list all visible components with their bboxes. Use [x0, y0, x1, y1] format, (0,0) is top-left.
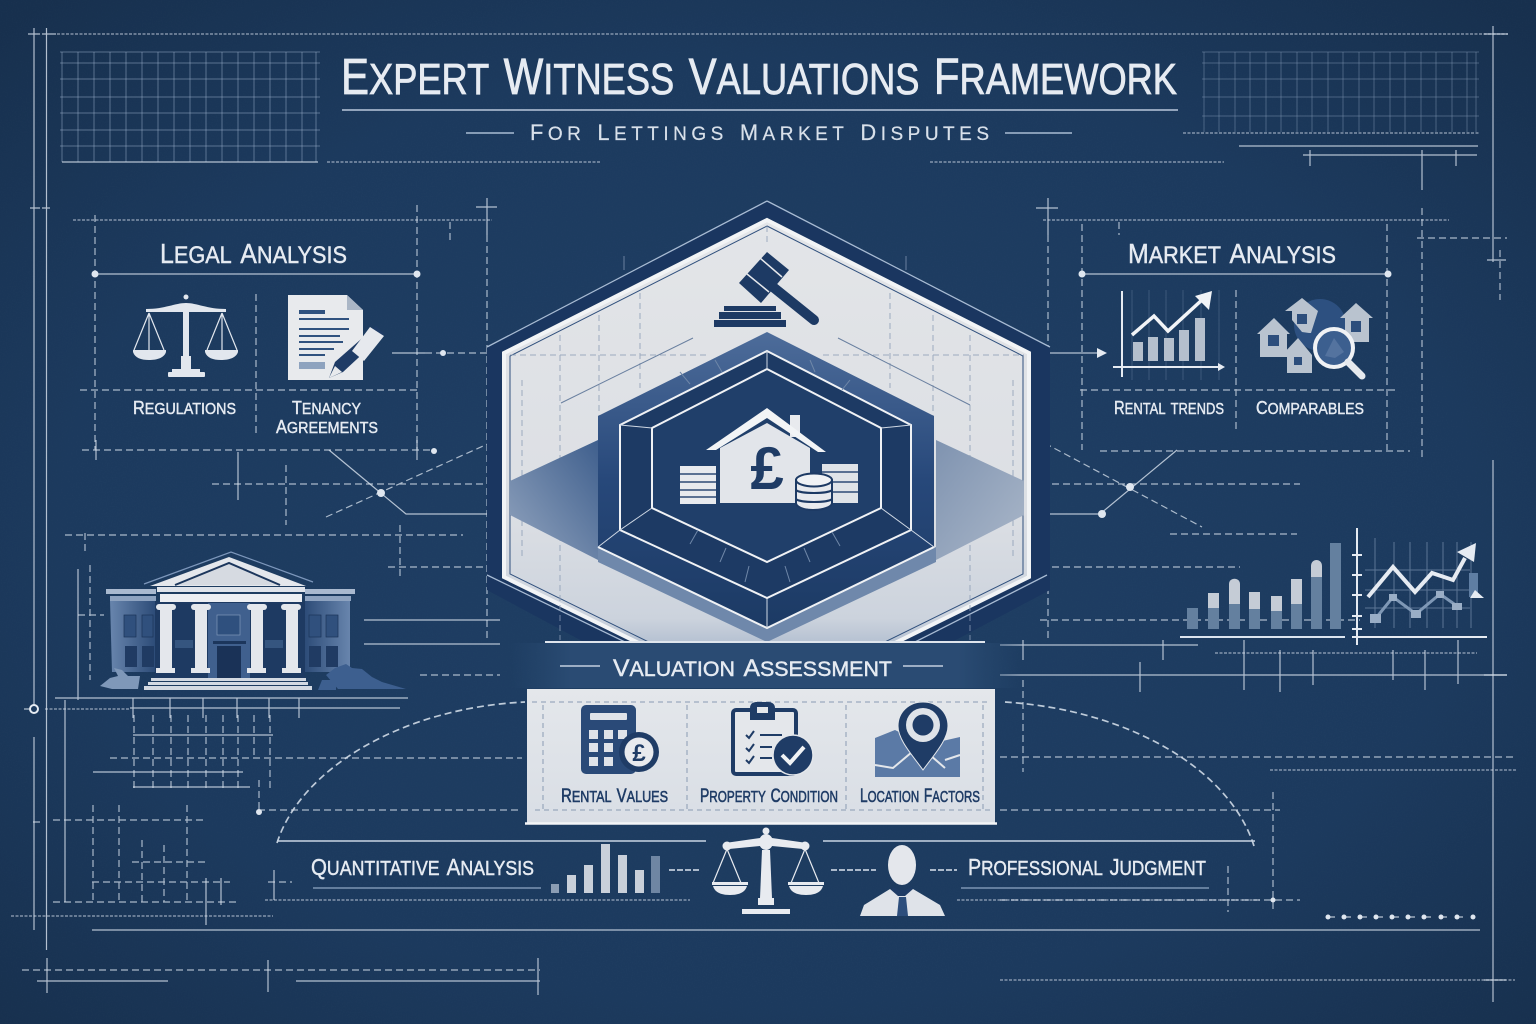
icon: comparables houses with magnifier: [1257, 298, 1373, 376]
label: regulations: Regulations: [133, 394, 236, 419]
heading: market analysis: Market Analysis: [1128, 233, 1336, 271]
dashed arc around valuation panel: [277, 702, 1254, 846]
icon: scales regulations: [133, 294, 238, 377]
title underline: [342, 109, 1178, 111]
dot row bottom right: [1326, 914, 1476, 920]
icon: location map pin: [875, 702, 960, 777]
connector dashes: [669, 869, 957, 871]
icon: gavel: [714, 252, 814, 327]
label: tenancy agreements: Agreements: [276, 413, 378, 438]
label: property condition: Property Condition: [700, 781, 838, 807]
heading band: valuation assessment: Valuation Assessment: [613, 650, 892, 683]
panel: quantitative analysis: [277, 841, 1255, 893]
title: Expert Witness Valuations Framework: [341, 38, 1177, 108]
bar chart: market bars: [1180, 543, 1345, 637]
label: comparables: Comparables: [1256, 394, 1364, 419]
label: tenancy agreements: [276, 394, 378, 438]
icon: calculator with pound: £: [632, 740, 646, 767]
icon: rental trend chart: [1113, 290, 1225, 380]
panel: legal analysis: [133, 233, 384, 438]
subtitle: For Lettings Market Disputes: [530, 116, 989, 146]
hexagon blueprint marks: [510, 226, 1024, 640]
icon: house with pound: £: [750, 435, 784, 502]
hexagon light body: [502, 218, 1031, 641]
label: quantitative analysis: Quantitative Analysis: [311, 850, 534, 882]
label: tenancy agreements: Tenancy: [292, 394, 361, 419]
inner shadow: [598, 547, 936, 642]
icon: professional person: [860, 845, 945, 916]
icon: tenancy document with pen: [288, 295, 384, 380]
icon: courthouse: [100, 552, 406, 690]
line chart: market trends: [1352, 528, 1487, 645]
label: location factors: Location Factors: [860, 781, 980, 807]
shaded side bands: [510, 440, 598, 560]
blueprint grid: top right: [1202, 52, 1479, 132]
icon: house with pound: [706, 408, 826, 503]
central hexagon: [486, 200, 1050, 641]
panel: valuation assessment: [525, 689, 997, 824]
bar chart: quantitative: [551, 844, 660, 893]
panel: market analysis: [1113, 233, 1373, 419]
label: professional judgment: Professional Judgment: [968, 850, 1206, 882]
heading band: valuation assessment: [510, 642, 1020, 688]
hexagon outer dark band: [487, 211, 1050, 641]
blueprint grid: top left: [60, 52, 320, 162]
icon: balance scales: [712, 828, 824, 914]
label: rental trends: Rental trends: [1114, 394, 1224, 419]
icon: calculator with pound: [581, 705, 659, 774]
heading: legal analysis: Legal Analysis: [160, 233, 347, 271]
icon: clipboard checklist: [733, 702, 813, 775]
label: rental values: Rental Values: [561, 781, 668, 807]
icon: coin stacks: [680, 464, 858, 510]
inner navy hexagon: [598, 332, 934, 628]
arrow: market connector: [1097, 348, 1107, 358]
inner ring: [620, 351, 911, 598]
